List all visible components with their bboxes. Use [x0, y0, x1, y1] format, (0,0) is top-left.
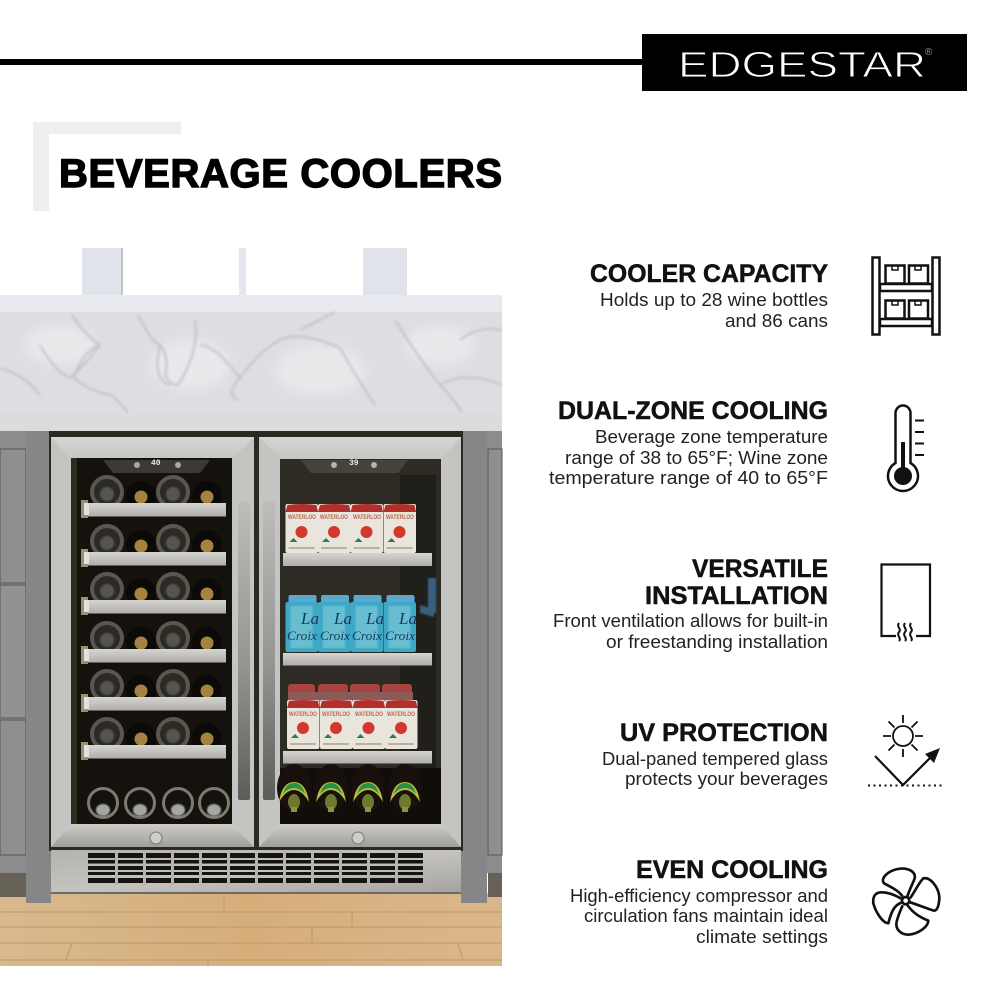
middle row: La Croix cans [286, 595, 417, 652]
top row: Waterloo cans: WATERLOO [288, 515, 316, 521]
description: climate settings [696, 926, 828, 947]
description: circulation fans maintain ideal [584, 905, 828, 926]
bottom row: Waterloo cans [287, 684, 418, 749]
blue light glow [420, 578, 436, 617]
heading: VERSATILE [692, 555, 828, 583]
top row: Waterloo cans: WATERLOO [386, 515, 414, 521]
heading: COOLER CAPACITY [590, 260, 828, 288]
middle row: La Croix cans: La [365, 609, 384, 628]
description [570, 885, 828, 947]
logo: EdgeStar: ® [925, 47, 933, 58]
description: Front ventilation allows for built-in [553, 610, 828, 631]
floor [0, 893, 502, 966]
logo: EdgeStar: EDGESTAR [678, 44, 926, 85]
door frame [259, 437, 461, 847]
display panel [301, 459, 408, 473]
description [553, 610, 828, 652]
wine bottle rows [89, 474, 222, 753]
icon: storage rack [872, 258, 940, 334]
feature: dual-zone cooling [549, 397, 924, 491]
feature: versatile installation [553, 555, 930, 652]
product photo: built-in beverage cooler [0, 248, 502, 966]
middle row: La Croix cans: Croix [320, 628, 350, 643]
description: Holds up to 28 wine bottles [600, 289, 828, 310]
door handle [238, 502, 250, 800]
display panel: 40 [151, 459, 161, 468]
description: or freestanding installation [606, 631, 828, 652]
marble backsplash [0, 312, 502, 414]
heading [645, 555, 828, 610]
bottom row: Waterloo cans: WATERLOO [355, 712, 383, 718]
wine shelves [81, 500, 226, 760]
front vent grille [51, 850, 461, 894]
heading: DUAL-ZONE COOLING [558, 397, 828, 425]
middle row: La Croix cans: La [333, 609, 352, 628]
feature: UV protection [602, 715, 944, 789]
green bottles [277, 764, 422, 812]
middle row: La Croix cans: La [300, 609, 319, 628]
feature: even cooling [570, 856, 939, 947]
top rule line [0, 59, 642, 65]
door lock [150, 832, 162, 844]
left door: wine zone [51, 437, 254, 847]
cooler body shadow [49, 431, 463, 851]
middle row: La Croix cans: Croix [385, 628, 415, 643]
interior [71, 458, 232, 824]
description: High-efficiency compressor and [570, 885, 828, 906]
door frame [51, 437, 254, 847]
countertop edge [0, 413, 502, 431]
middle row: La Croix cans: Croix [352, 628, 382, 643]
door lock [352, 832, 364, 844]
window frames [0, 248, 502, 313]
bottom row: Waterloo cans: WATERLOO [322, 712, 350, 718]
display panel: 39 [349, 459, 359, 468]
middle row: La Croix cans: La [398, 609, 417, 628]
description: range of 38 to 65°F; Wine zone [565, 447, 828, 468]
description: Dual-paned tempered glass [602, 748, 828, 769]
logo: EdgeStar [642, 34, 967, 91]
heading: INSTALLATION [645, 582, 828, 610]
feature: cooler capacity [590, 258, 940, 334]
heading: UV PROTECTION [620, 719, 828, 747]
description: temperature range of 40 to 65°F [549, 467, 828, 488]
title: BEVERAGE COOLERS [59, 152, 502, 196]
description: protects your beverages [625, 768, 828, 789]
cabinets [0, 431, 502, 903]
top row: Waterloo cans: WATERLOO [320, 515, 348, 521]
description: Beverage zone temperature [595, 426, 828, 447]
description [600, 289, 828, 331]
icon: cabinet with heat vent [882, 564, 930, 641]
heading: EVEN COOLING [636, 856, 828, 884]
top row: Waterloo cans [286, 504, 416, 553]
right door: beverage zone [259, 437, 461, 847]
top row: Waterloo cans: WATERLOO [353, 515, 381, 521]
beverage shelves [283, 553, 432, 764]
middle row: La Croix cans: Croix [287, 628, 317, 643]
description: and 86 cans [725, 310, 828, 331]
title frame [33, 122, 181, 211]
description [549, 426, 828, 488]
bottom wine bottles [88, 788, 228, 818]
door handle [263, 502, 275, 800]
display panel [103, 459, 210, 473]
interior [280, 459, 441, 824]
description [602, 748, 828, 789]
icon: fan [873, 869, 939, 935]
icon: thermometer [888, 406, 924, 491]
bottom row: Waterloo cans: WATERLOO [289, 712, 317, 718]
icon: sun and reflected ray [868, 715, 944, 786]
bottom row: Waterloo cans: WATERLOO [387, 712, 415, 718]
